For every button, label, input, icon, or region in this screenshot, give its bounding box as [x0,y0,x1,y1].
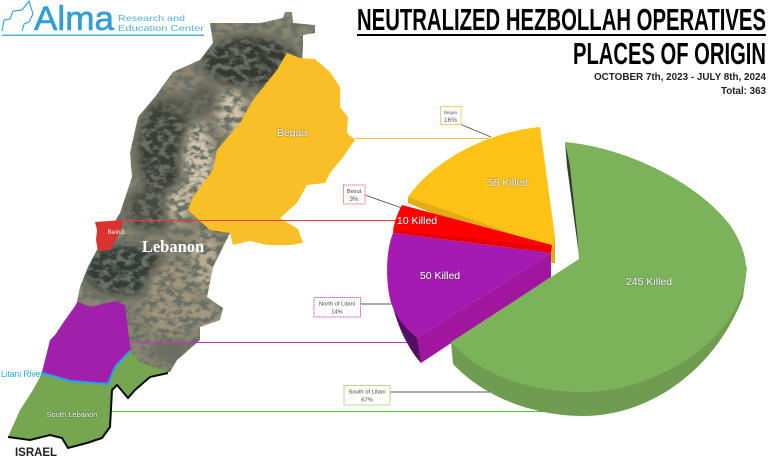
slice: South of Litani 245 Killed [451,142,747,416]
region: South Lebanon [8,351,168,448]
callout: Beirut 3%: 3% [350,197,359,203]
label: Israel: ISRAEL [15,447,57,459]
Litani River line [42,351,130,384]
logo wordmark: Alma [34,0,114,38]
data label: 58 Killed: 58 Killed [488,177,528,189]
icon: Lebanon outline [2,1,33,31]
region: North of Litani [42,301,130,383]
label: South Lebanon: South Lebanon [47,410,97,419]
3D pie chart [387,127,747,416]
callout: North of Litani 14% [314,298,360,317]
map of Lebanon [1,0,355,459]
total: Total: 363 [721,86,766,97]
data label: 245 Killed: 245 Killed [626,276,672,288]
label: Beirut: Beirut [108,229,125,236]
callout: Beirut 3% [344,185,365,204]
region: Beqaa [188,53,355,245]
callout: South of Litani 67%: 67% [361,398,373,404]
logo tagline: Research and [118,13,185,23]
slice: North of Litani 50 Killed [387,233,551,363]
date range: OCTOBER 7th, 2023 - JULY 8th, 2024 [594,72,766,83]
label: Lebanon: Lebanon [142,237,204,256]
label: Beqaa: Beqaa [277,127,307,139]
connector lines from map to pie [112,138,545,412]
satellite base terrain [42,12,315,372]
label: Litani River: Litani River [1,369,43,379]
title [357,2,766,97]
callout: Beqaa 16%: 16% [444,117,457,124]
region: Beirut [95,220,123,251]
callout: South of Litani 67% [344,386,390,405]
callout: North of Litani 14%: 14% [331,310,343,316]
logo tagline [118,13,204,33]
logo tagline: Education Center [118,23,204,33]
callout: North of Litani 14%: North of Litani [319,302,355,308]
data label: 10 Killed: 10 Killed [397,215,437,227]
data label: 50 Killed: 50 Killed [420,270,460,282]
callout: Beqaa 16% [440,106,461,124]
slice: Beqaa 58 Killed [408,127,555,263]
callout: South of Litani 67%: South of Litani [348,390,386,396]
logo: Alma Research and Education Center [2,0,204,38]
callout: Beqaa 16%: Beqaa [444,110,458,115]
Israel border line [8,373,168,448]
callout: Beirut 3%: Beirut [347,189,362,195]
callout leader lines [361,124,491,392]
slice: Beirut 10 Killed [393,205,552,253]
